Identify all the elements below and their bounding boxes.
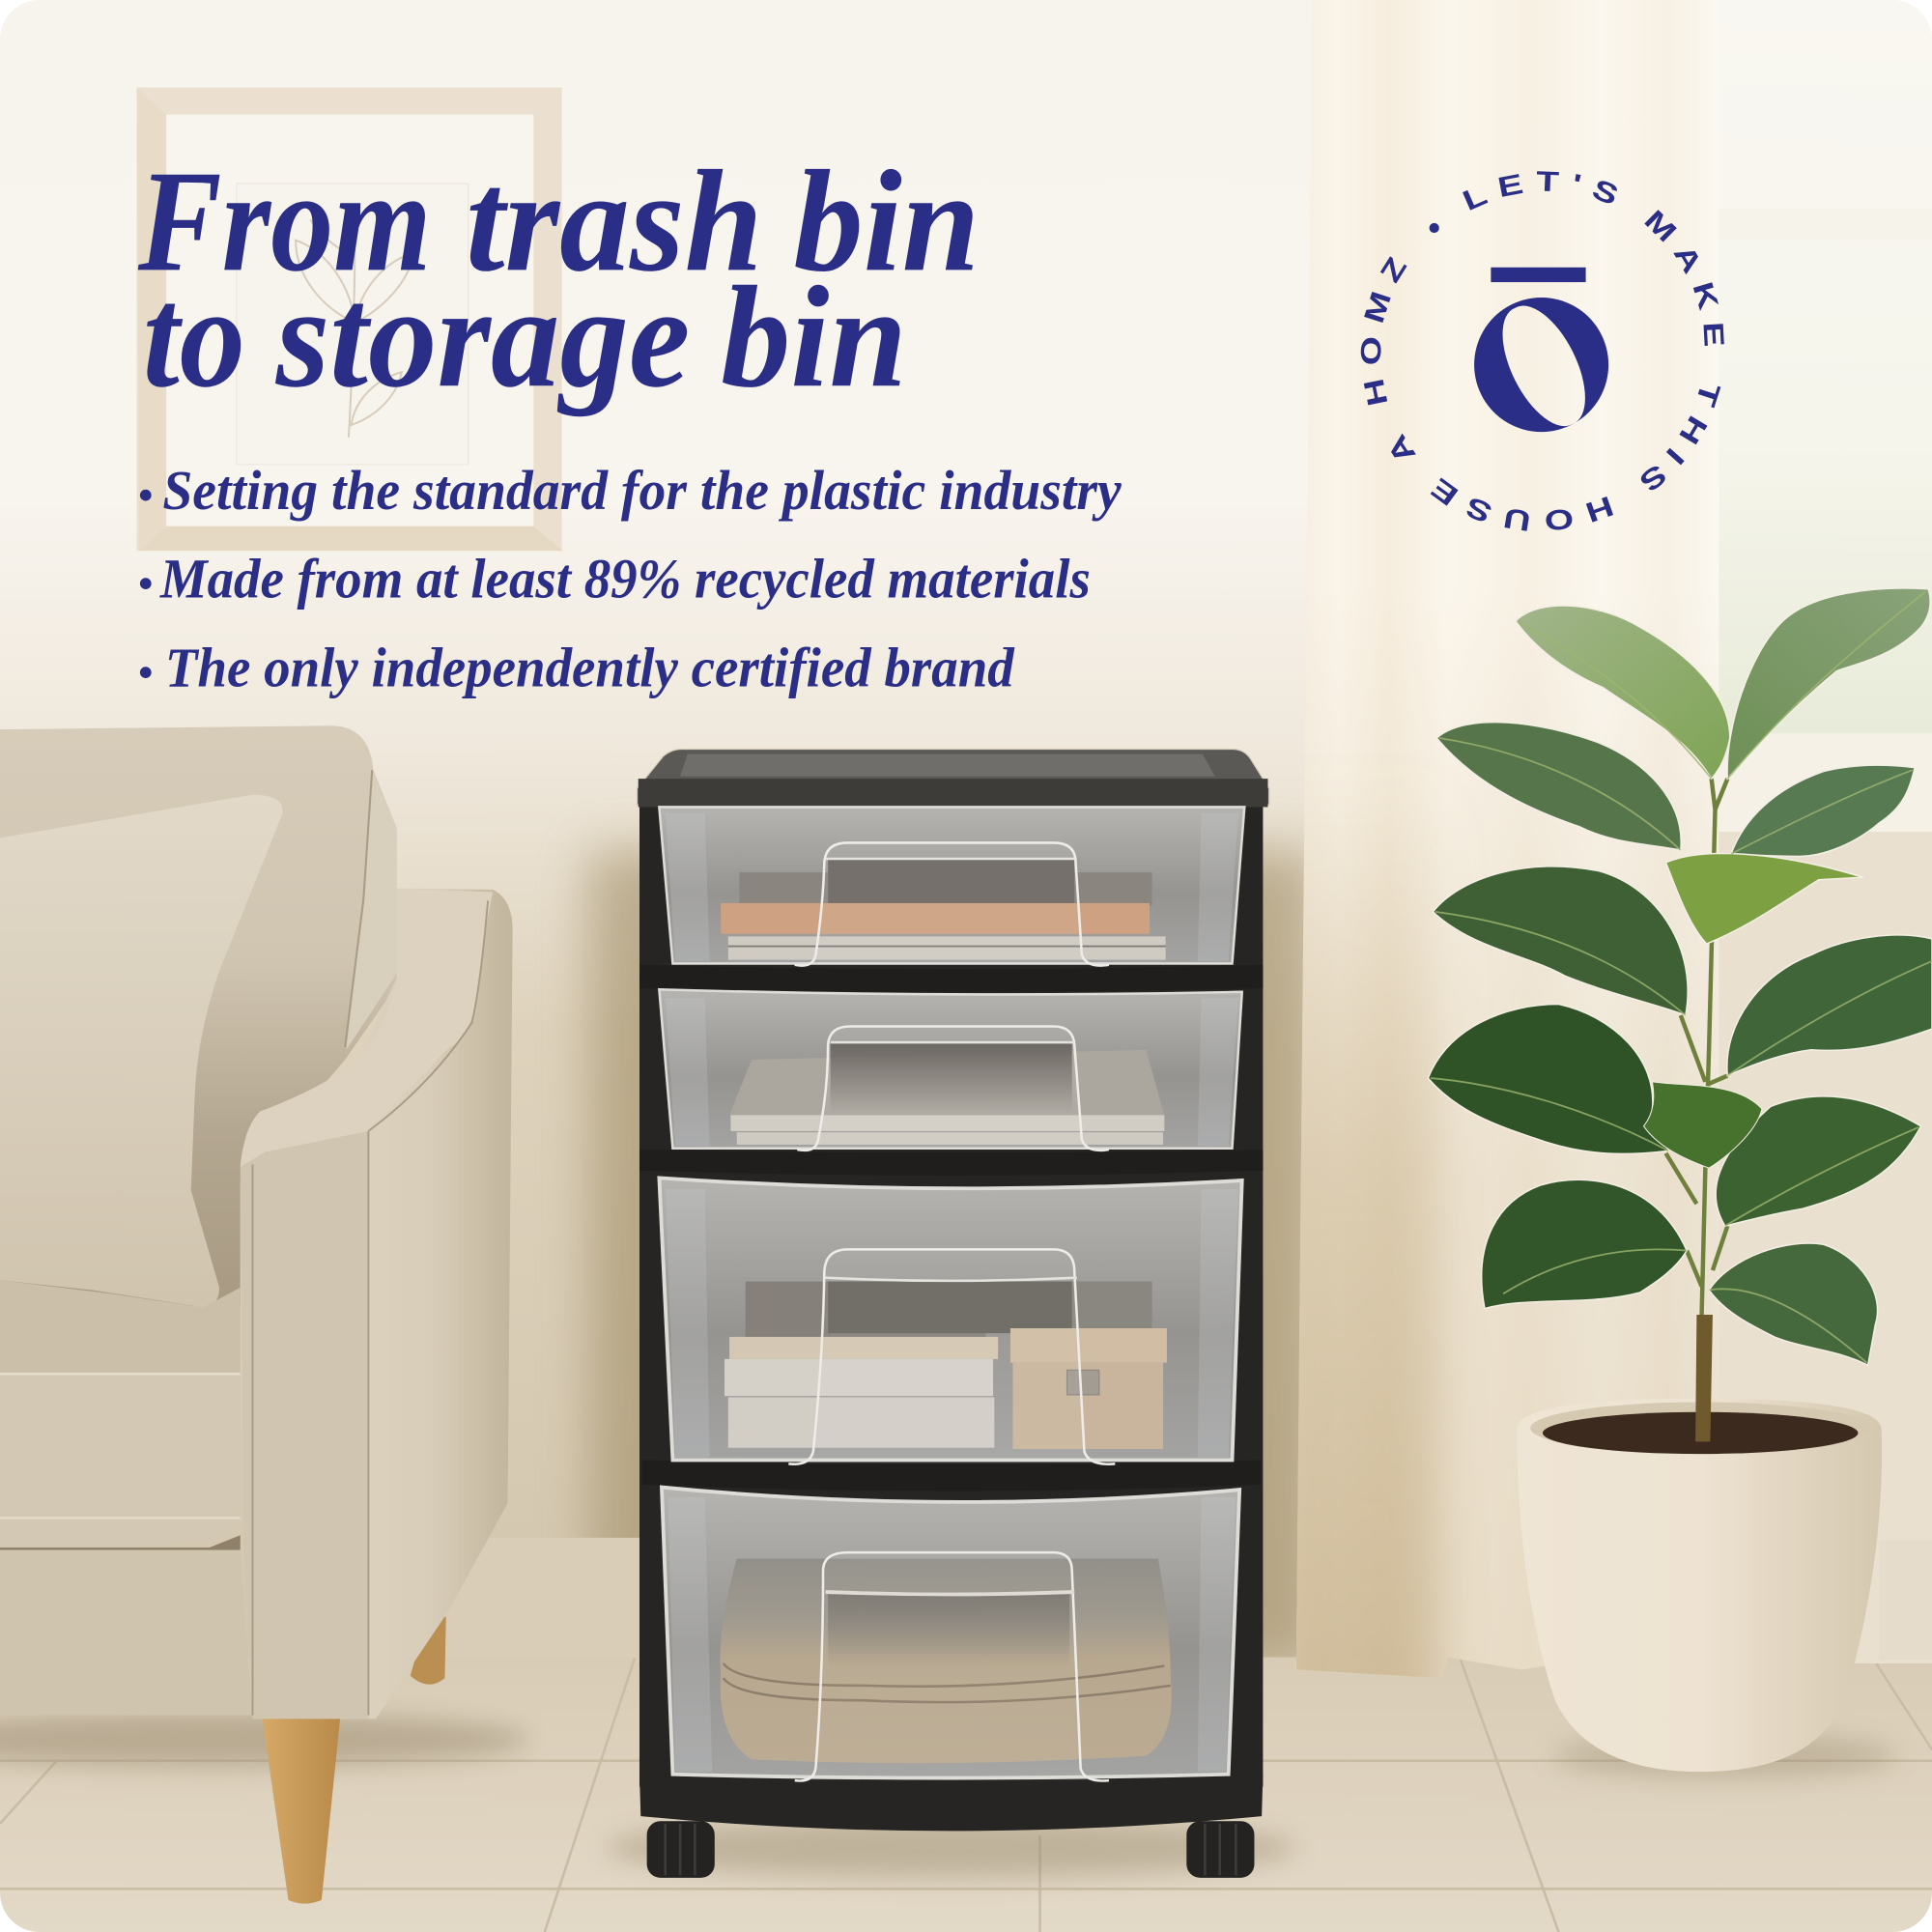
- title: storage: [275, 256, 690, 417]
- leaf: small centre: [1644, 1082, 1762, 1168]
- sofa arm top and side: [308, 889, 513, 1719]
- leaf: lower right: [1716, 1096, 1921, 1226]
- drawer 2: [659, 989, 1242, 1151]
- title: to: [143, 256, 245, 417]
- benefit bullets: •: [138, 472, 153, 519]
- circular slogan: LET'S MAKE THIS HOUSE A HOMZ: [1360, 171, 1724, 531]
- seat shadow gap: [0, 1535, 241, 1550]
- wheels: [647, 1821, 1254, 1878]
- wall art frame: [137, 88, 563, 551]
- leaf: upper left: [1436, 723, 1681, 850]
- art line sketch: [296, 219, 414, 438]
- leaf: centre light: [1665, 854, 1863, 944]
- trunk: [1695, 1315, 1713, 1441]
- sofa back side panel: [346, 842, 396, 1049]
- leaf: bottom right: [1709, 1243, 1878, 1365]
- sofa back seam: [345, 770, 372, 1047]
- window: [1719, 733, 1932, 1663]
- drawer 1: [659, 807, 1244, 966]
- benefit bullets: [138, 459, 1122, 698]
- benefit bullets: •: [138, 649, 153, 696]
- title: From: [137, 140, 431, 301]
- benefit bullets: •: [138, 561, 153, 608]
- benefit bullets: The only independently certified brand: [165, 636, 1015, 698]
- lid: [637, 750, 1269, 805]
- title: bin: [721, 256, 907, 417]
- sofa back leg: [411, 1616, 446, 1685]
- brand emblem badge: [1360, 171, 1724, 531]
- leaf: upper right: [1731, 765, 1915, 856]
- shelf rails: [639, 965, 1263, 992]
- drawer 3: [659, 1178, 1242, 1464]
- pillow: [0, 795, 282, 1307]
- leaf: top left: [1516, 606, 1730, 779]
- potted fiddle-leaf plant: [1428, 588, 1932, 1772]
- title: bin: [793, 140, 980, 301]
- leaf midribs: [1431, 591, 1932, 1363]
- leaf: lower left: [1482, 1179, 1687, 1309]
- side posts: [639, 788, 1263, 1786]
- sofa arm front panel: [241, 1112, 368, 1719]
- curtain: [1269, 0, 1719, 1725]
- benefit bullets: Setting the standard for the plastic industry: [162, 459, 1122, 522]
- seat cushion front: [0, 1374, 241, 1547]
- stem: [1665, 779, 1727, 1319]
- sofa front leg: [263, 1719, 340, 1904]
- baseboard: [443, 1538, 653, 1659]
- sofa seams: [252, 900, 488, 1716]
- title: [137, 140, 980, 417]
- seat cushion top: [0, 1280, 241, 1374]
- leaf: large left: [1428, 1005, 1668, 1153]
- leaf: mid right: [1727, 935, 1932, 1076]
- planter pot: [1517, 1399, 1882, 1772]
- cabinet wall shadow: [589, 850, 1316, 1663]
- leaf: top right: [1727, 588, 1930, 779]
- slogan dot: [1430, 223, 1439, 233]
- floor: [0, 1658, 1932, 1932]
- base: [639, 1775, 1263, 1831]
- drawer 4: [662, 1488, 1239, 1780]
- wall: [0, 0, 1719, 1658]
- benefit bullets: Made from at least 89% recycled materials: [159, 548, 1091, 611]
- seat seams: [0, 1374, 241, 1518]
- sofa arm curved top: [241, 889, 493, 1167]
- storage drawer cabinet: [637, 750, 1269, 1878]
- logo letter o: [1474, 298, 1608, 432]
- sofa back: [0, 725, 397, 1306]
- title: trash: [466, 140, 763, 301]
- leaf: mid left: [1433, 867, 1688, 1015]
- folded blanket: [721, 1559, 1172, 1763]
- soil: [1543, 1412, 1858, 1454]
- macron bar: [1491, 268, 1586, 282]
- pot inner rim: [1530, 1403, 1870, 1454]
- sofa base: [0, 1550, 252, 1716]
- sofa: [0, 725, 513, 1904]
